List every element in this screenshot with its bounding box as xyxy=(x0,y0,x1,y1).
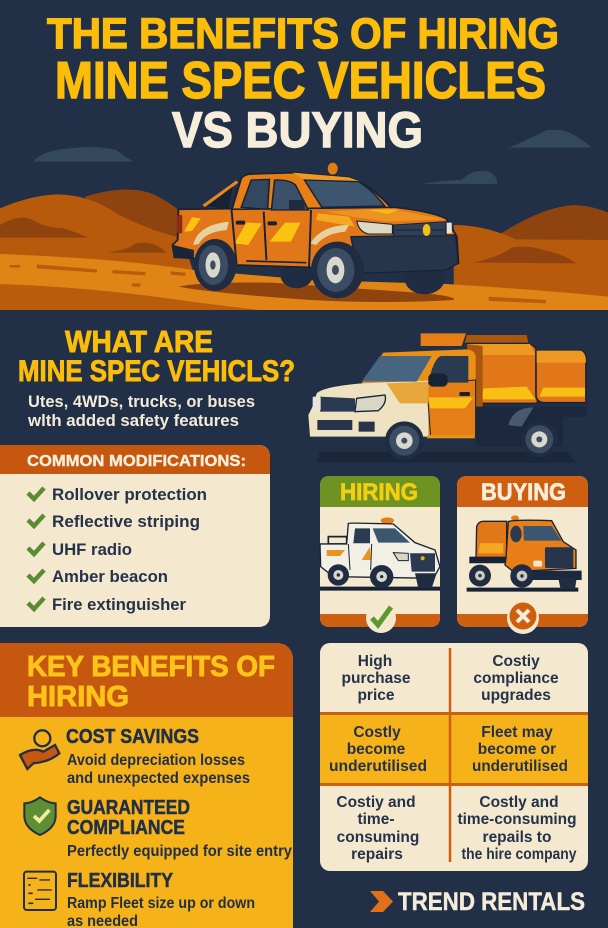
what are heading: MINE SPEC VEHICLS? xyxy=(18,355,295,388)
what are heading xyxy=(18,324,295,388)
title: VS BUYING xyxy=(172,102,423,158)
table text: left column: purchase xyxy=(342,670,411,687)
table text: right column: compliance xyxy=(473,670,559,687)
title: THE BENEFITS OF HIRING xyxy=(47,10,559,58)
hero scene: desert landscape xyxy=(0,130,608,310)
panel: key benefits of hiring xyxy=(0,643,293,928)
definition text: Utes, 4WDs, trucks, or buses xyxy=(28,392,255,411)
table text: left column: Costly xyxy=(353,724,401,741)
panel heading: COMMON MODIFICATIONS: xyxy=(27,453,246,470)
table text: left column: time- xyxy=(357,811,395,828)
table text: left column: underutilised xyxy=(329,758,427,775)
modification list: Amber beacon xyxy=(52,567,168,586)
table text: right column: Fleet may xyxy=(481,724,553,741)
benefit: cost savings: and unexpected expenses xyxy=(67,770,250,787)
table text: right column: time-consuming xyxy=(458,811,576,828)
key benefits heading: KEY BENEFITS OF xyxy=(27,651,275,683)
what are heading: WHAT ARE xyxy=(65,324,213,359)
modification list: Fire extinguisher xyxy=(52,595,186,614)
table text: left column: Costiy and xyxy=(336,794,416,811)
title: MINE SPEC VEHICLES xyxy=(55,52,546,110)
modification list: UHF radio xyxy=(52,540,132,559)
definition text: wlth added safety features xyxy=(27,411,239,430)
benefit: flexibility: FLEXIBILITY xyxy=(67,870,174,892)
benefit: guaranteed compliance: GUARANTEED xyxy=(67,797,190,819)
benefit: guaranteed compliance xyxy=(67,797,292,860)
table text: right column: become or xyxy=(478,741,556,758)
title xyxy=(47,10,559,158)
table text: left column: price xyxy=(357,687,395,704)
modification list xyxy=(52,485,207,614)
table text: left column: High xyxy=(358,653,392,670)
panel: hiring card: HIRING xyxy=(340,479,418,506)
modification list: Reflective striping xyxy=(52,512,200,531)
table text: left column: become xyxy=(347,741,406,758)
panel: buying card: BUYING xyxy=(481,479,566,506)
table text: right column: upgrades xyxy=(481,687,551,704)
panel: common modifications xyxy=(0,445,270,627)
key benefits heading xyxy=(27,651,275,713)
buying orange truck xyxy=(467,515,582,592)
benefit: guaranteed compliance: Perfectly equipped for site entry xyxy=(67,843,292,860)
benefit: flexibility: Ramp Fleet size up or down xyxy=(67,895,255,912)
logo: trend rentals: TREND RENTALS xyxy=(398,888,585,916)
table text: left column: consuming xyxy=(337,829,419,846)
icon: shield xyxy=(24,797,56,835)
table text: right column xyxy=(458,653,577,863)
panel: buying card xyxy=(457,476,588,634)
service truck illustration xyxy=(308,333,587,463)
table text: right column: underutilised xyxy=(472,758,568,775)
benefit: cost savings: Avoid depreciation losses xyxy=(67,752,245,769)
icon: clipboard xyxy=(24,872,56,910)
table text: right column: Costiy xyxy=(492,653,540,670)
modification checks xyxy=(28,488,44,609)
key benefits heading: HIRING xyxy=(27,681,129,713)
benefit: flexibility xyxy=(67,870,255,928)
table text: right column: Costly and xyxy=(479,794,559,811)
table text: left column: repairs xyxy=(351,846,403,863)
buying cross badge xyxy=(507,602,539,634)
definition text xyxy=(27,392,255,430)
hiring check badge xyxy=(366,603,396,633)
table text: right column: the hire company xyxy=(462,846,577,863)
modification list: Rollover protection xyxy=(52,485,207,504)
panel: hiring card xyxy=(320,476,440,633)
hero truck: orange mine spec ute xyxy=(173,163,458,302)
benefit: guaranteed compliance: COMPLIANCE xyxy=(67,817,185,839)
benefit: cost savings xyxy=(66,726,250,787)
benefit: cost savings: COST SAVINGS xyxy=(66,726,199,748)
table text: right column: repails to xyxy=(483,829,551,846)
icon: hand with coin xyxy=(20,730,59,769)
comparison table xyxy=(320,643,588,871)
table text: left column xyxy=(329,653,427,863)
hiring white ute xyxy=(320,517,440,591)
